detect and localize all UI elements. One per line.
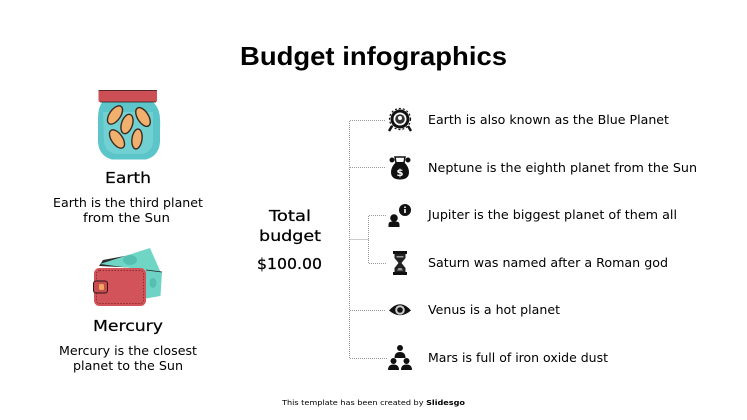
heading: Earth: Earth — [105, 169, 151, 187]
text block: total budget: budget — [259, 227, 321, 245]
text block: Earth description: from the Sun — [83, 211, 170, 225]
footer credit: This template has been created by Slidesgo — [281, 399, 465, 407]
icon: person with info bubble — [388, 204, 411, 227]
text block: Earth description — [53, 196, 203, 225]
text block: Mercury description: Mercury is the closest — [59, 344, 197, 358]
text block: Earth description: Earth is the third planet — [53, 196, 203, 210]
heading: Mercury: Mercury — [93, 317, 163, 335]
text block: total budget — [257, 207, 322, 273]
text block: list items: Neptune is the eighth planet from the Sun — [428, 161, 697, 175]
icon: hourglass — [393, 251, 407, 275]
text block: list items: Jupiter is the biggest planet of them all — [427, 208, 677, 222]
text block: list items: Mars is full of iron oxide dust — [428, 351, 608, 365]
text block: Mercury description: planet to the Sun — [73, 359, 183, 373]
connector lines — [350, 120, 387, 358]
text block: Mercury description — [59, 344, 197, 373]
text block: list items — [427, 113, 697, 365]
text block: list items: Venus is a hot planet — [428, 303, 560, 317]
icon: money bag: $ — [396, 168, 404, 179]
text block: total budget: $100.00 — [257, 255, 322, 273]
icon: money bag — [390, 157, 410, 180]
icon: people hierarchy — [388, 345, 412, 370]
text block: total budget: Total — [268, 207, 311, 225]
icon: jar of coins — [98, 90, 160, 160]
text block: list items: Earth is also known as the Blue Planet — [428, 113, 669, 127]
text block: list items: Saturn was named after a Roman god — [428, 256, 668, 270]
title: Budget infographics — [240, 41, 507, 71]
icon: award badge — [389, 108, 411, 131]
icon: eye — [389, 304, 411, 315]
icon: wallet with banknotes — [94, 248, 162, 306]
